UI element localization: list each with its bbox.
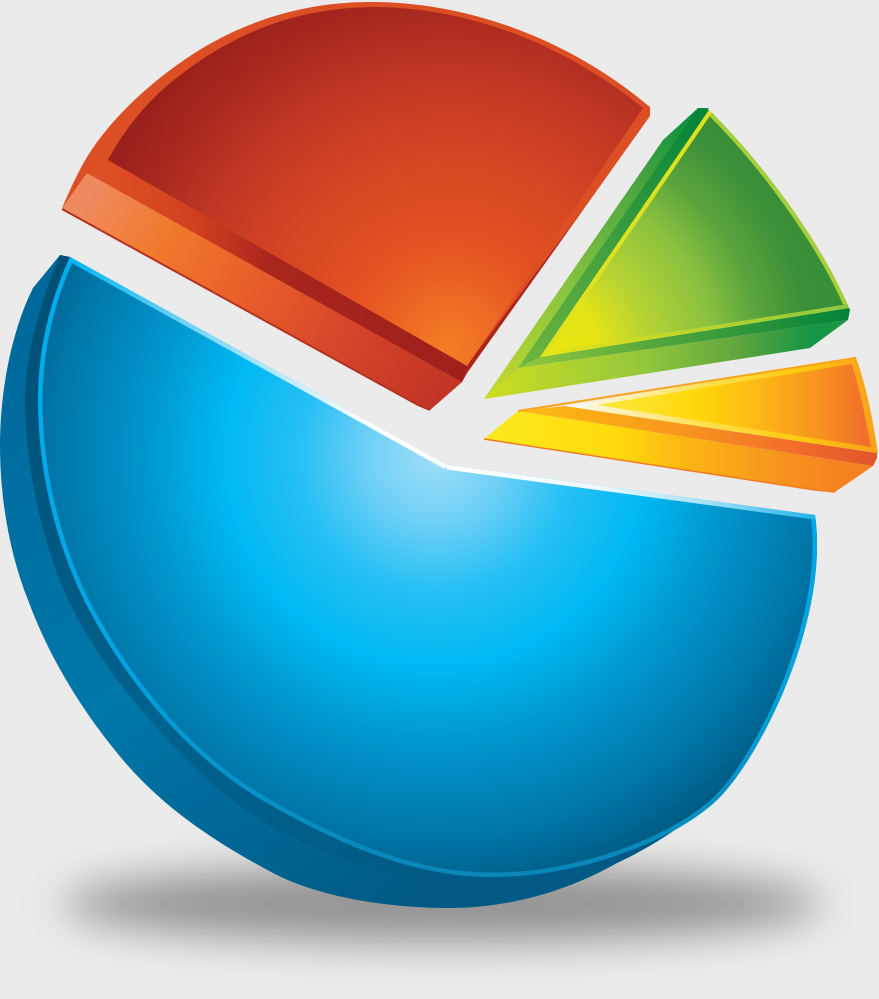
green slice top face <box>540 110 849 357</box>
blue rim left straight edge <box>70 257 447 465</box>
blue slice dark inner band <box>25 255 726 886</box>
orange slice top edge line <box>518 358 877 453</box>
slice: green <box>484 108 850 399</box>
slice: orange <box>484 358 877 492</box>
blue slice top face <box>38 257 817 877</box>
ground shadow <box>62 866 822 942</box>
blue rim right straight edge <box>447 465 815 515</box>
blue slice side wall <box>0 255 726 908</box>
orange slice front wall <box>484 411 873 492</box>
orange slice upper wall band <box>518 406 877 466</box>
green slice rim <box>540 110 849 357</box>
green slice front wall upper <box>518 308 850 368</box>
orange slice top rim <box>565 358 877 453</box>
green slice front wall lower <box>484 320 848 399</box>
red slice silhouette rim <box>62 2 650 410</box>
green rim left edge <box>540 110 709 357</box>
green slice left wall inner <box>518 108 709 368</box>
green rim arc <box>709 110 849 308</box>
blue slice rim <box>38 257 817 877</box>
red slice wall bottom edge <box>62 209 430 410</box>
red slice ledge band <box>87 160 467 382</box>
green slice left wall outer <box>484 108 709 399</box>
red slice front wall <box>62 173 462 410</box>
orange slice wall bottom edge <box>484 439 835 492</box>
orange slice top face <box>597 364 871 447</box>
red slice top face <box>108 7 643 366</box>
blue rim arc <box>38 257 817 877</box>
green rim base edge <box>540 308 849 357</box>
slice: red <box>62 2 650 410</box>
slice: blue <box>0 255 817 908</box>
red slice right dark edge <box>462 207 585 382</box>
